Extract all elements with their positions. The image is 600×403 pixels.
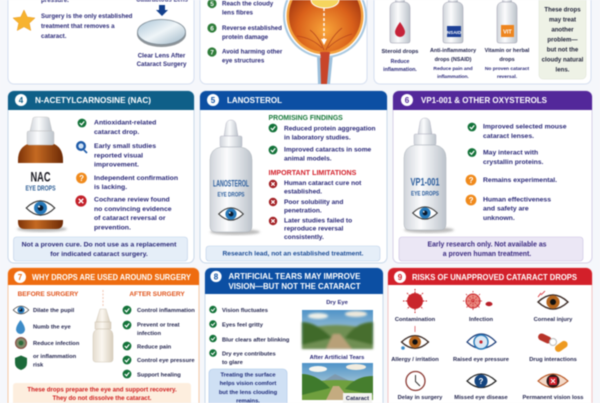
risk: missed disease: Missed eye disease [454,395,508,401]
callout: not a proven cure: Not a proven cure. Do not use as a replacement [22,242,176,248]
risk: drug interactions [529,332,577,363]
column: after surgery: Prevent or treat [137,322,180,328]
header [8,268,199,285]
bullet: experimental [466,175,557,185]
text: surgery statement: Surgery is the only established [41,13,133,20]
callout: early research: Early research only. Not available as [428,242,546,248]
callout: treating the surface: helps vision comfort [220,381,276,387]
column: vitamin or herbal drops: VIT [503,30,512,36]
callout: other problem: but not the [547,46,579,54]
bullet: antioxidant: cataract drop. [94,129,139,136]
risk: contamination: Contamination [395,317,436,323]
header [393,91,592,110]
label: after artificial tears: After Artificial Tears [310,355,364,361]
bullet: crystallin proteins: crystallin proteins. [483,159,544,166]
callout: not a proven cure: for indicated cataract surgery. [50,251,148,258]
column: vitamin or herbal drops: reversal. [497,74,518,80]
bullet: confirmation lacking [76,173,178,191]
bullet: antioxidant [78,119,156,136]
icon: star [13,10,35,30]
panel 5: Lanosterol [200,91,387,263]
column: NSAID drops: NSAID [447,30,462,35]
callout: treating the surface: Treating the surface [220,373,276,379]
label: cataract [343,393,372,403]
bullet: crystallin proteins [468,148,544,166]
section: important limitations: penetration. [284,208,322,215]
callout: other problem: another [551,26,574,34]
label: clear lens after surgery: Cataract Surgery [137,61,187,68]
symptom list: Dry eye contributes [222,351,276,357]
column: after surgery: Control inflammation [137,308,195,314]
section: promising findings: Reduced protein aggregation [284,126,376,132]
step 7: eye structures [222,58,265,64]
symptom list: Blur clears after blinking [222,337,290,343]
callout: early research [399,237,583,261]
callout: prepare and recover [13,383,191,403]
callout: other problem: lens. [556,66,570,74]
header: WHY DROPS ARE USED AROUND SURGERY [32,273,191,282]
panel: cataract surgery [8,0,194,84]
panel 8: artificial tears [205,268,383,403]
step 5 [207,0,274,17]
header: ARTIFICIAL TEARS MAY IMPROVE [228,272,361,281]
risk: corneal injury [534,291,573,323]
header: VP1-001 & OTHER OXYSTEROLS [421,96,548,105]
bullet: mouse lenses: cataract lenses. [483,133,534,140]
column: after surgery [123,291,195,378]
header: 4 [19,96,24,105]
step 7 [207,47,283,64]
bullet: effectiveness unknown [466,195,551,222]
column: vitamin or herbal drops: Vitamin or herbal [485,48,529,54]
step 6 [207,23,282,41]
callout: other problem: problem— [547,36,578,44]
callout: other problem [539,0,586,79]
risk: raised pressure [453,334,509,363]
icon: germ eye [16,338,26,348]
risk: drug interactions: Drug interactions [529,357,577,363]
column: steroid drops: inflammation. [383,67,417,73]
bullet: early studies: reported visual [94,152,143,159]
column: vitamin or herbal drops: drops [499,57,515,63]
symptom list: to glare [222,360,243,366]
callout: prepare and recover: They do not dissolve the cataract. [53,395,152,402]
bullet: Cochrane review: Cochrane review found [94,196,170,204]
illustration: dropper bottle [93,290,113,362]
label: dry eye: Dry Eye [326,300,349,306]
header: 9 [398,273,403,282]
section: important limitations: reproduce reversal [284,226,344,233]
panel: what a drop must do [200,0,367,84]
column: before surgery: risk [33,362,44,368]
illustration: lanosterol bottle: EYE DROPS [218,192,245,198]
column: before surgery [13,291,80,370]
callout: treating the surface [209,369,287,403]
bullet: mouse lenses [468,123,567,140]
bullet: mouse lenses: Improved selected mouse [483,124,566,130]
step 7: Avoid harming other [222,48,282,56]
callout: research lead [206,246,380,261]
bullet: confirmation lacking: is lacking. [94,184,127,191]
column: after surgery: Control eye pressure [137,358,195,364]
column: NSAID drops: inflammation. [437,74,470,80]
step 5: Reach the cloudy [222,0,273,8]
section: promising findings: animal models. [284,156,332,162]
icon: pupil [13,306,29,314]
section: important limitations: Later studies failed to [284,218,352,224]
step 6: protein damage [222,34,269,41]
risk: raised pressure: Raised eye pressure [453,357,509,363]
bullet: early studies [76,141,156,169]
column: steroid drops [382,0,418,73]
section: promising findings: Improved cataracts in some [284,146,371,154]
callout: prepare and recover: These drops prepare the eye and support recovery. [27,386,177,394]
step 5: lens fibres [222,10,254,16]
risk: delay in surgery: Delay in surgery [398,395,443,401]
illustration: VP1-001 bottle [404,118,454,233]
bullet: crystallin proteins: May interact with [483,150,538,156]
section: promising findings: PROMISING FINDINGS [268,115,343,122]
illustration: eye cross-section [283,0,367,84]
icon: shield [15,356,27,370]
arrow: to clear lens [156,5,168,16]
header: 8 [214,272,219,282]
icon: clear lens [137,20,186,47]
column: NSAID drops: Anti-inflammatory [430,48,476,54]
section: important limitations: Poor solubility and [284,199,343,206]
section: important limitations: IMPORTANT LIMITATIONS [268,169,357,177]
bullet: early studies: Early small studies [94,143,156,150]
column: after surgery: AFTER SURGERY [129,291,185,298]
bullet: experimental: Remains experimental. [483,177,557,184]
risk: infection: Infection [469,317,493,323]
panel: other drops [374,0,591,84]
panel 7: drops around surgery [8,268,199,403]
section: important limitations: Human cataract cure not [284,180,361,187]
callout: not a proven cure [14,237,188,261]
header [205,268,383,294]
header: 7 [18,273,23,282]
callout: treating the surface: but the lens clouding [219,390,278,396]
image: blurred landscape [302,310,373,349]
callout: other problem: These drops [544,6,581,14]
bullet: antioxidant: Antioxidant-related [94,120,156,126]
bullet: effectiveness unknown: Human effectiveness [483,196,551,204]
illustration: VP1-001 bottle: VP1-001 [410,176,440,188]
illustration: NAC bottle: EYE DROPS [26,184,56,192]
text: surgery statement: cataract. [41,33,67,40]
step 5: 5 [210,1,214,8]
illustration: lanosterol bottle: LANOSTEROL [213,178,249,188]
illustration: NAC bottle: NAC [30,170,51,184]
column: after surgery: Reduce pain [137,345,172,351]
panel 4: N-acetylcarnosine [8,91,194,263]
column: before surgery: or inflammation [33,354,76,360]
symptom list [209,306,290,366]
bullet: effectiveness unknown: unknown. [483,215,515,222]
risk: allergy: Allergy / irritation [391,357,439,363]
risk: missed disease [454,374,508,401]
section: important limitations: consistently. [284,234,324,241]
callout: early research: a proven human treatment. [443,251,531,258]
callout: research lead: Research lead, not an established treatment. [223,250,364,258]
panel 9: risks of unapproved drops [388,268,592,403]
label: clear lens after surgery: Clear Lens After [138,52,185,60]
step 6: 6 [210,26,214,32]
callout: other problem: cloudy natural [542,56,584,64]
risk: permanent vision loss: Permanent vision loss [522,395,584,401]
callout: other problem: may treat [549,16,576,24]
column: steroid drops: Steroid drops [382,49,418,55]
bullet: early studies: improvement. [94,162,139,169]
column: vitamin or herbal drops: No proven cataract [485,67,529,72]
column: vitamin or herbal drops [485,0,530,80]
column: NSAID drops [430,0,476,80]
symptom list: Eyes feel gritty [222,323,264,329]
bullet: Cochrane review: of cataract reversal or [94,215,166,222]
step 7: 7 [210,50,214,56]
illustration: lanosterol bottle [210,120,260,235]
panel 6: VP1-001 and oxysterols [393,91,592,263]
column: before surgery: Numb the eye [33,324,71,330]
bullet: Cochrane review: no convincing evidence [94,206,172,213]
bullet: Cochrane review: prevention. [94,224,131,231]
column: after surgery: infection [137,331,161,337]
illustration: NAC bottle [17,117,67,232]
text: surgery statement [41,0,133,40]
header: RISKS OF UNAPPROVED CATARACT DROPS [412,273,577,282]
text: surgery statement: treatment that removes a [41,23,115,30]
column: before surgery: Dilate the pupil [33,308,75,314]
header: N-ACETYLCARNOSINE (NAC) [35,96,151,105]
risk: corneal injury: Corneal injury [534,317,573,323]
icon: drop [16,320,25,334]
column: NSAID drops: drops (NSAID) [435,57,472,63]
column: after surgery: Support healing [137,372,181,378]
risk: delay in surgery [398,372,443,401]
section: promising findings: in laboratory studies. [284,134,351,142]
bullet: effectiveness unknown: and safety are [483,206,529,213]
section: promising findings [268,115,376,162]
column: before surgery: Reduce infection [33,341,80,347]
header [200,91,387,110]
label: cataract: Cataract [346,396,369,402]
header: 5 [211,96,216,105]
bullet: confirmation lacking: Independent confirmation [94,175,178,182]
header: 6 [405,96,410,105]
risk: infection [463,291,493,323]
bullet: Cochrane review [75,195,172,231]
image: clear landscape [302,363,373,400]
symptom list: Vision fluctuates [222,308,268,314]
header: VISION—BUT NOT THE CATARACT [228,282,360,291]
header: LANOSTEROL [227,96,282,105]
risk: missed disease: ? [479,377,484,386]
column: before surgery: BEFORE SURGERY [18,291,79,298]
section: important limitations [268,169,362,241]
risk: contamination [395,289,436,323]
column: steroid drops: Reduce [391,59,409,65]
risk: permanent vision loss [522,374,584,401]
step 6: Reverse established [222,25,282,32]
header [8,91,194,110]
header [388,268,592,285]
column: NSAID drops: Reduce pain and [433,67,473,72]
section: important limitations: established. [284,188,322,196]
risk: allergy [391,326,439,363]
illustration: VP1-001 bottle: EYE DROPS [411,190,439,198]
